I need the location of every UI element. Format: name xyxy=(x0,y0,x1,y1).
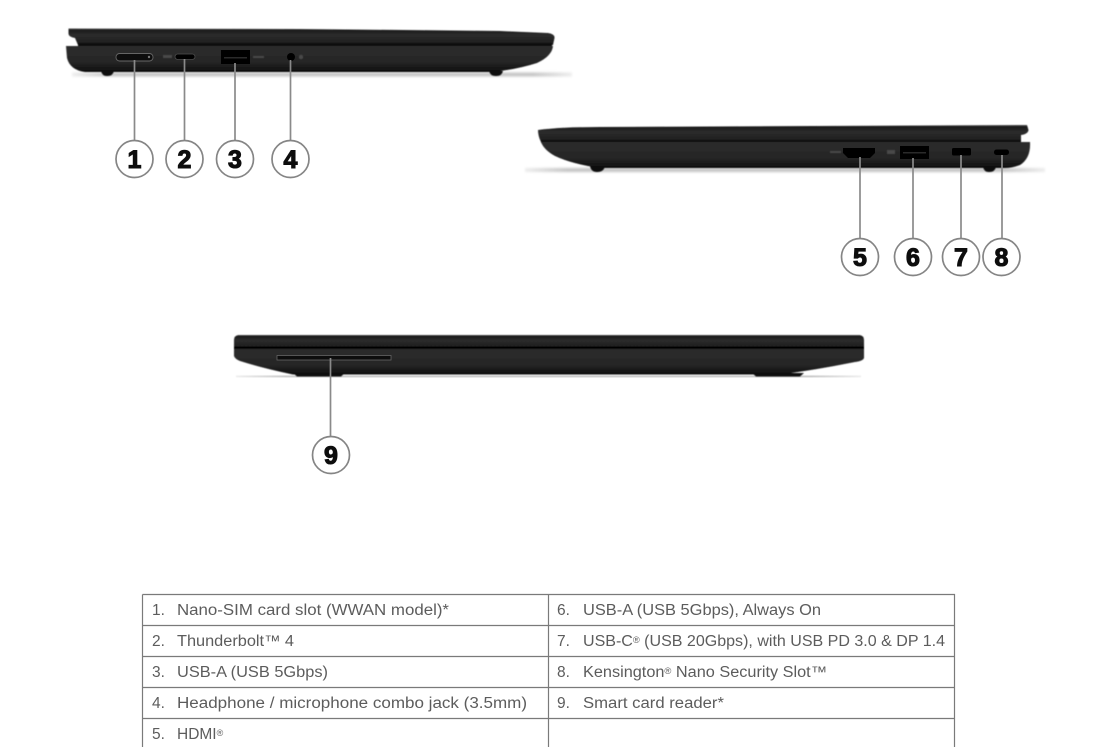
legend row 4 xyxy=(152,695,724,712)
legend row 2 xyxy=(152,633,945,650)
port: USB-A xyxy=(221,50,264,64)
callout 4: 4 xyxy=(284,146,298,174)
legend row 1: Nano-SIM card slot (WWAN model)* xyxy=(177,602,449,619)
table grid xyxy=(142,594,954,747)
callout 7 xyxy=(942,155,980,276)
laptop left side view xyxy=(66,28,572,76)
legend row 4: Headphone / microphone combo jack (3.5mm) xyxy=(177,695,527,712)
legend row 3: 3. xyxy=(152,664,165,681)
legend row 5: 5. xyxy=(152,726,165,743)
callout 8: 8 xyxy=(995,244,1009,272)
callouts 5 to 8 xyxy=(842,155,1020,276)
legend row 2: USB-C® (USB 20Gbps), with USB PD 3.0 & DP 1.4 xyxy=(583,633,945,650)
port markings xyxy=(830,150,895,154)
port: smart card reader slot xyxy=(277,356,391,360)
port: Thunderbolt 4 xyxy=(163,54,195,60)
legend row 3: 8. xyxy=(557,664,570,681)
legend row 5 xyxy=(152,726,224,743)
legend row 5: HDMI® xyxy=(177,726,224,743)
callout 1: 1 xyxy=(128,146,142,174)
legend row 1: 1. xyxy=(152,602,165,619)
legend row 2: 7. xyxy=(557,633,570,650)
legend row 3: Kensington ® Nano Security Slot™ xyxy=(583,664,827,681)
legend row 2: 2. xyxy=(152,633,165,650)
callout 2 xyxy=(166,59,203,178)
legend row 2: Thunderbolt™ 4 xyxy=(177,633,294,650)
port: USB-C xyxy=(952,148,971,156)
callouts 1 to 4 xyxy=(116,59,309,178)
callout 1 xyxy=(116,60,153,178)
callout 3 xyxy=(216,63,254,178)
callout 2: 2 xyxy=(178,146,191,174)
callout 4 xyxy=(272,60,309,178)
laptop front view xyxy=(234,335,864,377)
callout 3: 3 xyxy=(228,146,242,174)
callout 5: 5 xyxy=(853,244,867,272)
legend row 1: USB-A (USB 5Gbps), Always On xyxy=(583,602,821,619)
legend row 1: 6. xyxy=(557,602,570,619)
callout 6: 6 xyxy=(906,244,920,272)
legend row 4: 4. xyxy=(152,695,165,712)
callout 8 xyxy=(983,155,1020,276)
port: nano-SIM slot xyxy=(116,54,153,61)
port legend table xyxy=(142,594,954,747)
legend row 4: Smart card reader* xyxy=(583,695,724,712)
legend row 4: 9. xyxy=(557,695,570,712)
legend row 3 xyxy=(152,664,827,681)
port: USB-A always on xyxy=(900,146,929,159)
port: HDMI xyxy=(843,148,875,158)
callout 6 xyxy=(894,158,932,276)
legend row 1 xyxy=(152,602,821,619)
callout 7: 7 xyxy=(954,244,968,272)
legend row 3: USB-A (USB 5Gbps) xyxy=(177,664,328,681)
callout 9: 9 xyxy=(324,442,338,470)
port: headphone jack xyxy=(287,53,303,61)
callout 9 xyxy=(312,358,350,474)
laptop right side view xyxy=(525,125,1045,172)
port: Kensington slot xyxy=(994,150,1009,155)
callout 5 xyxy=(842,157,878,276)
